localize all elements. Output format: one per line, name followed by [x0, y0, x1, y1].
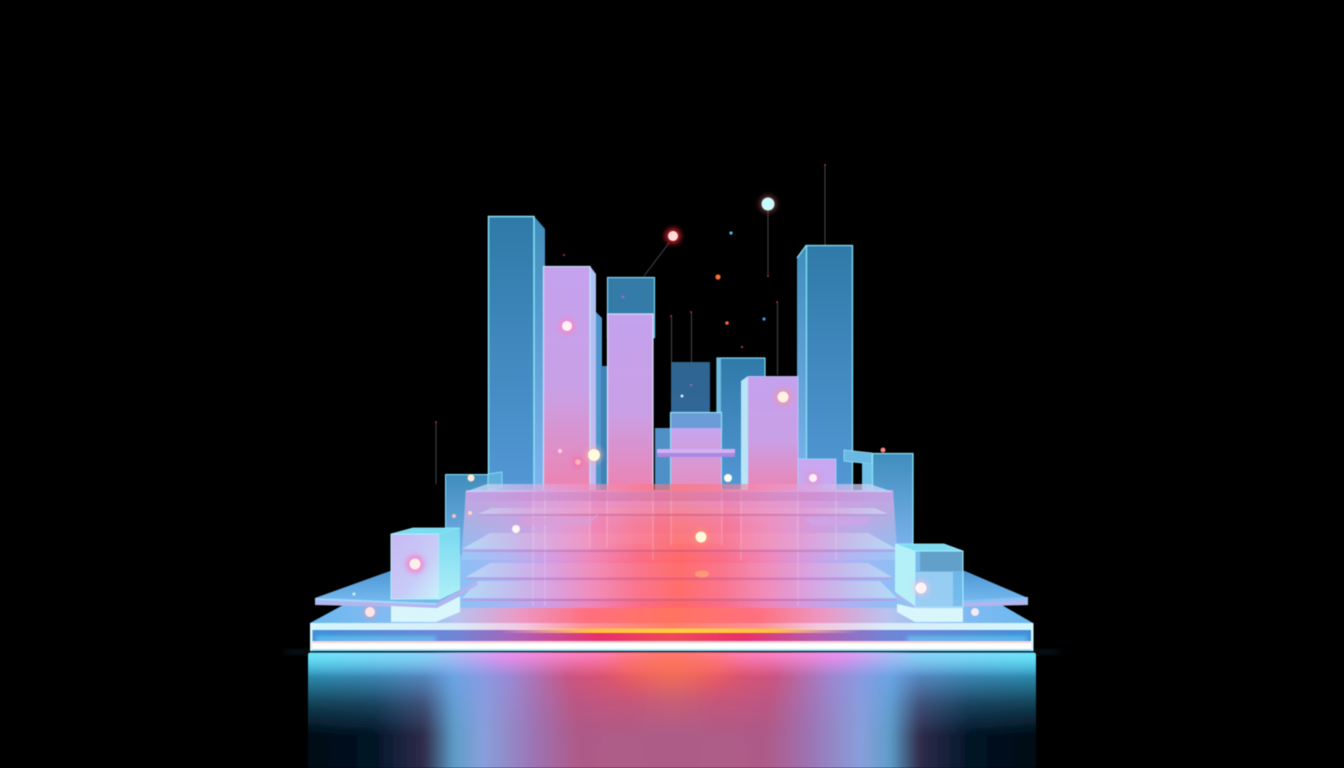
- cube: left: [391, 528, 460, 600]
- base side caps: [310, 623, 312, 651]
- base bottom white rim: [310, 641, 1033, 651]
- bar: blue behind lilac column: [608, 278, 654, 338]
- small sparks: [729, 231, 733, 235]
- base inner cyan glow: [316, 637, 436, 641]
- plate 5: [462, 581, 897, 601]
- ambient glow at platform ends: [282, 650, 1062, 654]
- bar: tall blue right: [797, 245, 853, 490]
- stack upper lilac haze: [462, 490, 897, 608]
- plate 1: [465, 484, 893, 501]
- glowing data points: [352, 164, 979, 618]
- bar: lilac centre-left: [608, 314, 653, 492]
- plate 2: [478, 508, 888, 516]
- pale cube pedestals: [391, 596, 963, 622]
- stepped glass stack: [462, 484, 897, 608]
- bar: rear blue slivers: [596, 312, 671, 490]
- bar: short blue far right: [844, 450, 913, 560]
- shelf above centre block: [657, 449, 735, 457]
- bar: lilac right: [741, 376, 798, 492]
- block: small lilac right: [798, 459, 836, 492]
- bar: lilac left: [544, 266, 596, 492]
- base inner band: [310, 629, 1033, 643]
- platform: base top surface: [310, 604, 1033, 623]
- glow halos: [364, 196, 929, 618]
- floor reflection: [307, 651, 1037, 768]
- thin connector lines: [436, 165, 825, 484]
- backing glass between cubes and stack: [440, 548, 920, 608]
- illustration: glass bar chart city on neon platform: [284, 163, 1060, 768]
- platform: neon base front: [310, 623, 1034, 651]
- large points: [762, 198, 774, 210]
- small tab left: [522, 514, 598, 525]
- ghosted columns through glass: [533, 492, 836, 606]
- bars: rear row: [596, 278, 765, 492]
- base hot orange line: [500, 628, 860, 633]
- base top rim: [310, 623, 1033, 630]
- plate 4: [466, 563, 892, 580]
- plate 3: [462, 533, 897, 560]
- bar: dark rear centre: [671, 362, 710, 432]
- right wing platform: [897, 571, 1028, 608]
- bar: low centre block: [670, 412, 722, 492]
- stack body: [462, 490, 897, 608]
- small tab right: [803, 518, 870, 525]
- bar: blue right of centre: [717, 358, 765, 490]
- bar: short blue far left: [446, 472, 502, 564]
- left wing platform: [315, 571, 478, 608]
- bar: tall blue left: [488, 216, 545, 490]
- cube: right: [895, 544, 963, 607]
